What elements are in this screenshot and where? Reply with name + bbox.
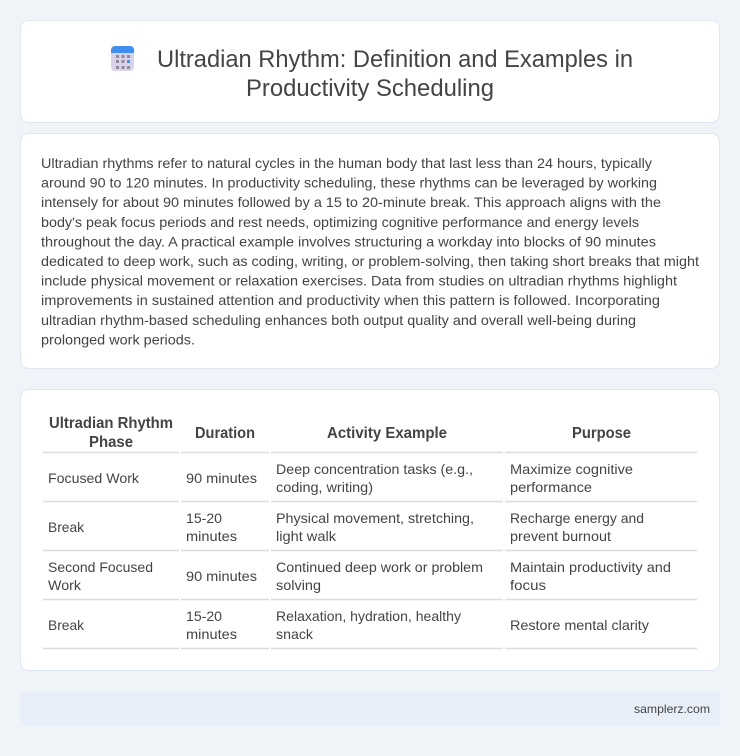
text block: description paragraph: throughout the day. A practical example involves structuring a workday into blocks of 90 minutes [41, 233, 656, 249]
text block: description paragraph: improvements in sustained attention and productivity when this pattern is followed. Incorporating [41, 292, 660, 308]
table row: break: Physical movement, stretching, [276, 510, 474, 526]
table row: second break: Restore mental clarity [510, 617, 649, 633]
title: Productivity Scheduling [246, 75, 494, 102]
table header: Purpose [572, 425, 631, 442]
table row lines [43, 452, 697, 648]
table row: second focused work: Maintain productivity and [510, 559, 671, 575]
footer: samplerz.com [634, 702, 710, 716]
icon: calendar [111, 46, 134, 71]
table row: focused work: 90 minutes [186, 470, 257, 486]
table row: break: light walk [276, 528, 337, 544]
table row: second focused work: 90 minutes [186, 568, 257, 584]
table header: Activity Example [327, 425, 447, 442]
footer [20, 692, 720, 726]
table row: second focused work: Work [48, 577, 82, 593]
table row: second break: snack [276, 626, 314, 642]
table row: focused work: Focused Work [48, 470, 140, 486]
text block: description paragraph: ultradian rhythm-based scheduling enhances both output quality and overall well-being during [41, 312, 636, 328]
table header: Phase [89, 434, 133, 451]
text block: description paragraph: dedicated to deep work, such as coding, writing, or problem-solving, then taking short breaks that might [41, 253, 699, 269]
panel: table card [20, 390, 720, 670]
table row: second break: Break [48, 617, 85, 633]
title [157, 46, 633, 102]
table row: focused work: coding, writing) [276, 479, 373, 495]
table row: second break [48, 608, 649, 642]
text block: description paragraph: include physical movement or relaxation exercises. Data from studies on ultradian rhythms highlight [41, 273, 677, 289]
table row: focused work: Deep concentration tasks (e.g., [276, 461, 473, 477]
table row: focused work [48, 461, 633, 495]
title: Ultradian Rhythm: Definition and Examples in [157, 46, 633, 73]
panel: description [20, 134, 720, 368]
table row: break: Break [48, 519, 85, 535]
table row: second focused work: solving [276, 577, 321, 593]
table row: second focused work: Continued deep work or problem [276, 559, 483, 575]
table row: focused work: performance [510, 479, 592, 495]
table row: break: minutes [186, 528, 237, 544]
table row: break [48, 510, 644, 544]
text block: description paragraph: Ultradian rhythms refer to natural cycles in the human body that last less than 24 hours, typically [41, 155, 652, 171]
table header [49, 415, 631, 451]
text block: description paragraph: around 90 to 120 minutes. In productivity scheduling, these rhythms can be leveraged by working [41, 175, 657, 191]
table row: focused work: Maximize cognitive [510, 461, 633, 477]
table row: second focused work: Second Focused [48, 559, 153, 575]
table row: second break: Relaxation, hydration, healthy [276, 608, 461, 624]
text block: description paragraph: intensely for about 90 minutes followed by a 15 to 20-minute break. This approach aligns with the [41, 194, 661, 210]
text block: description paragraph: body's peak focus periods and rest needs, optimizing cognitive performance and energy levels [41, 214, 639, 230]
table row: second focused work: focus [510, 577, 546, 593]
table row: second focused work [48, 559, 671, 593]
text block: description paragraph [41, 155, 699, 347]
table row: break: 15-20 [186, 510, 222, 526]
table row: second break: minutes [186, 626, 237, 642]
table header: Duration [195, 425, 255, 442]
panel: title card [20, 20, 720, 122]
table row: second break: 15-20 [186, 608, 222, 624]
table header: Ultradian Rhythm [49, 415, 173, 432]
text block: description paragraph: prolonged work periods. [41, 331, 195, 347]
table row: break: prevent burnout [510, 528, 611, 544]
table row: break: Recharge energy and [510, 510, 644, 526]
